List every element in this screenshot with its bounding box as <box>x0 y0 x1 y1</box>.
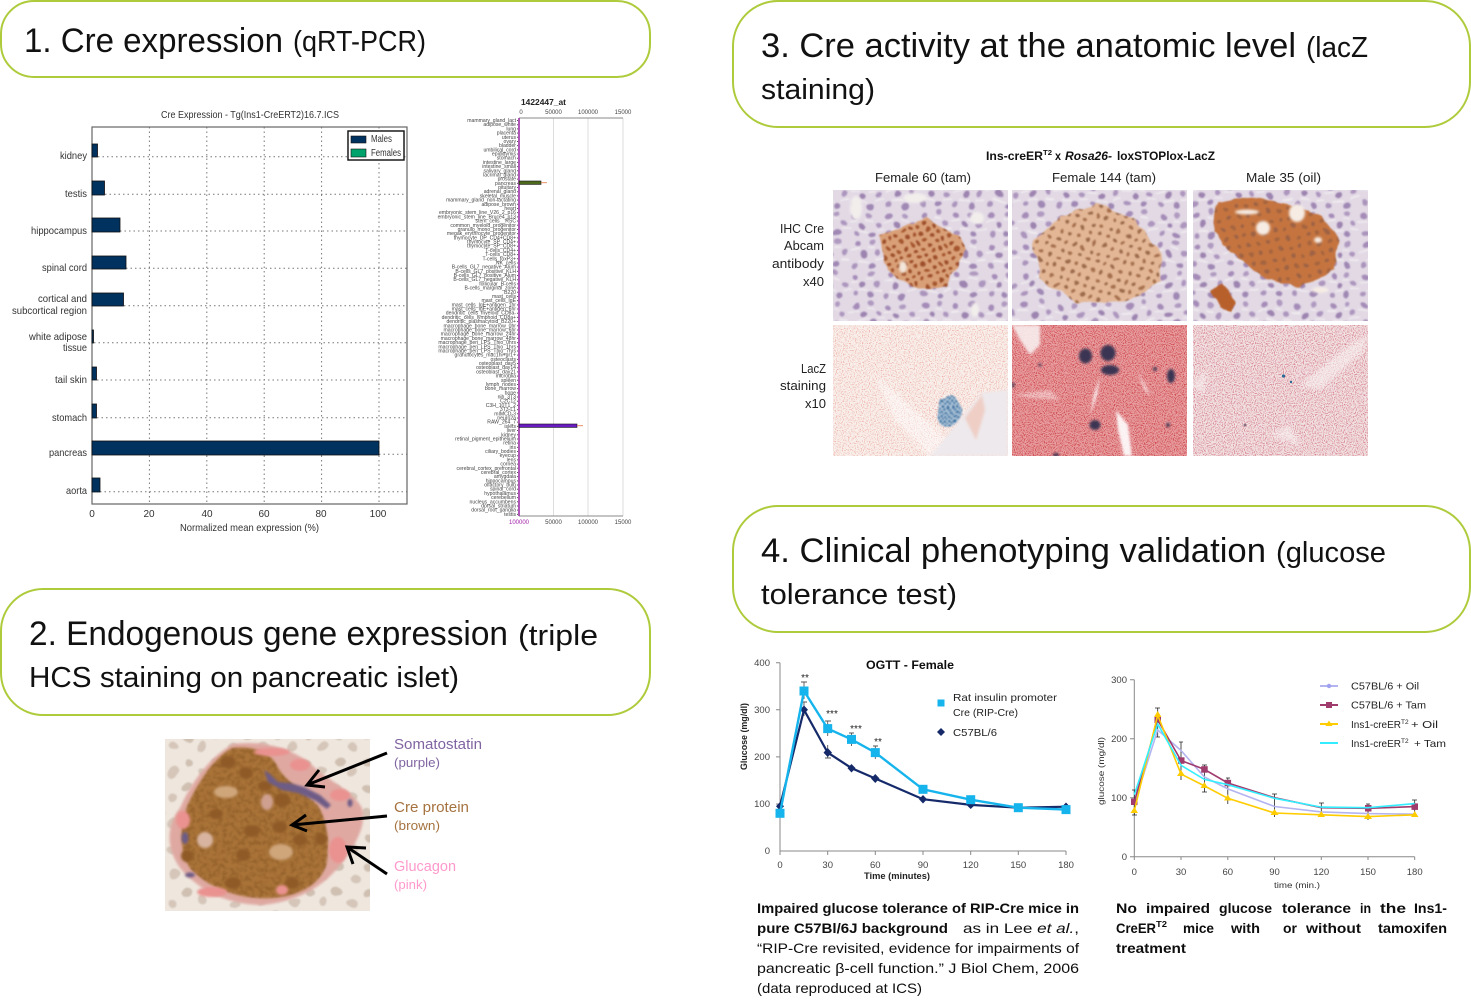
photo: IHC Male 35 <box>1193 190 1368 321</box>
bar chart: 1422447_at tissue atlas: T-cells_CD4+ <box>485 248 516 254</box>
bar chart: 1422447_at tissue atlas: pancreas <box>495 181 516 187</box>
bar chart: Cre expression by tissue: 100 <box>370 509 387 520</box>
bar chart: 1422447_at tissue atlas: spleen <box>501 378 516 384</box>
bar chart: 1422447_at tissue atlas: heart <box>504 206 517 212</box>
caption: no impaired glucose tolerance in Ins1-CreERT2: with <box>1230 921 1260 936</box>
line chart: Ins1-creERT2 glucose tolerance: 300 <box>1111 675 1127 686</box>
bar chart: 1422447_at tissue atlas: B-cells_GL7_negative_Alum <box>452 265 516 271</box>
column headers: Male 35 (oil) <box>1246 171 1321 185</box>
caption: no impaired glucose tolerance in Ins1-CreERT2: tolerance <box>1282 901 1351 916</box>
significance stars <box>801 673 882 748</box>
bar chart: 1422447_at tissue atlas: follicular_B-cells <box>479 281 516 287</box>
line chart: Ins1-creERT2 glucose tolerance: 180 <box>1407 867 1423 878</box>
caption: no impaired glucose tolerance in Ins1-CreERT2: tamoxifen <box>1378 921 1447 936</box>
row label: IHC Cre: antibody <box>772 257 825 271</box>
photo: IHC Female 60 <box>833 190 1008 321</box>
line chart: Ins1-creERT2 glucose tolerance: 120 <box>1313 867 1329 878</box>
label: Cre protein <box>394 800 469 833</box>
bar chart: Cre expression by tissue: subcortical region <box>12 305 87 317</box>
bar chart: 1422447_at tissue atlas: 15000 <box>615 110 632 116</box>
significance stars: ** <box>801 673 809 684</box>
bar chart: 1422447_at tissue atlas: ciliary_bodies <box>485 449 516 455</box>
bar chart: 1422447_at tissue atlas: lymph_nodes <box>486 382 516 388</box>
bar chart: 1422447_at tissue atlas: B-cells_GL7_negative_KLH <box>453 277 516 283</box>
bar chart: 1422447_at tissue atlas: osteoblast_day21 <box>476 369 516 375</box>
row label: LacZ staining: staining <box>780 379 826 393</box>
bar chart: 1422447_at tissue atlas: cornea <box>500 462 516 468</box>
bar chart: Cre expression by tissue: 0 <box>89 509 95 520</box>
label: Glucagon: Glucagon <box>394 859 456 875</box>
series: RIP-Cre <box>776 686 1070 818</box>
bar chart: 1422447_at tissue atlas: C3H_10T1_2 <box>486 403 516 409</box>
series: Ins1-creERT2 + Oil <box>1130 711 1418 819</box>
bar chart: Cre expression by tissue <box>12 109 407 534</box>
OGTT legend: Rat insulin promoter <box>953 692 1058 704</box>
line chart: Ins1-creERT2 glucose tolerance: 0 <box>1122 852 1127 863</box>
label: Cre protein: Cre protein <box>394 800 469 816</box>
bar chart: 1422447_at tissue atlas: prostate <box>498 177 516 183</box>
row label: IHC Cre: Abcam <box>784 239 824 253</box>
bar chart: Cre expression by tissue: aorta <box>66 485 87 497</box>
bar chart: 1422447_at tissue atlas: 50000 <box>545 520 563 526</box>
bar chart: 1422447_at tissue atlas: macrophage_bone_marrow_24hr <box>441 332 516 338</box>
row label: LacZ staining: LacZ <box>801 362 826 376</box>
bar chart: Cre expression by tissue: 40 <box>201 509 213 520</box>
bar chart: 1422447_at tissue atlas: nucleus_accumbens <box>470 499 516 505</box>
line chart: OGTT Female <box>739 658 1074 882</box>
bar chart: 1422447_at tissue atlas: NK_cells <box>496 260 516 266</box>
line chart: Ins1-creERT2 glucose tolerance: 60 <box>1223 867 1233 878</box>
arrow: to Cre protein <box>292 815 387 831</box>
line chart: OGTT Female: 200 <box>754 752 770 763</box>
bar chart: 1422447_at tissue atlas: retinal_pigment_epithelium <box>455 436 516 442</box>
bar chart: 1422447_at tissue atlas: cerebral_cortex_prefrontal <box>457 466 516 472</box>
line chart: Ins1-creERT2 glucose tolerance: time (min.) <box>1274 880 1320 890</box>
heading: Cre expression: 1. Cre expression <box>24 22 283 60</box>
panel: 3. Cre activity header <box>733 1 1470 127</box>
line chart: OGTT Female: 60 <box>870 860 881 871</box>
line chart: OGTT Female: 180 <box>1058 860 1074 871</box>
bar chart: Cre expression by tissue: hippocampus <box>31 225 87 237</box>
label: Cre protein: (brown) <box>394 819 440 833</box>
bar chart: Cre expression by tissue: 80 <box>315 509 327 520</box>
caption: no impaired glucose tolerance in Ins1-CreERT2 <box>1116 901 1447 956</box>
bar chart: 1422447_at tissue atlas: dorsal_striatum <box>481 504 516 510</box>
bar chart: 1422447_at tissue atlas: mIMCD-3 <box>494 411 516 417</box>
caption: no impaired glucose tolerance in Ins1-CreERT2: impaired <box>1146 901 1210 916</box>
heading: Clinical phenotyping validation: (glucose <box>1276 537 1386 569</box>
bar chart: 1422447_at tissue atlas: dendritic_plasmacytoid_B220+ <box>446 319 516 325</box>
bar chart: 1422447_at tissue atlas: stem_cells__RSC <box>476 219 516 225</box>
caption: no impaired glucose tolerance in Ins1-CreERT2: in <box>1360 901 1371 916</box>
bar chart: 1422447_at tissue atlas: mammary_gland_non-lactating <box>446 198 516 204</box>
label: Glucagon: (pink) <box>394 878 427 892</box>
bar chart: 1422447_at tissue atlas: nih_3T3 <box>498 394 516 400</box>
figure title: Ins-creERT2 x Rosa26: loxSTOPlox-LacZ <box>1117 149 1215 163</box>
bar chart: Cre expression by tissue: spinal cord <box>42 262 87 274</box>
caption: RIP-Cre impaired glucose tolerance: Impaired glucose tolerance of RIP-Cre mice in <box>757 901 1079 916</box>
caption: no impaired glucose tolerance in Ins1-CreERT2: treatment <box>1116 941 1186 956</box>
line chart: OGTT Female: 30 <box>822 860 833 871</box>
OGTT title: OGTT - Female <box>866 658 954 672</box>
bar chart: 1422447_at tissue atlas: macrophage_peri_LPS_Thio_0hrs <box>438 340 516 346</box>
second chart legend: Ins1-creER <box>1351 719 1401 731</box>
label: Glucagon <box>394 859 456 892</box>
second chart legend: Ins1-creER <box>1351 738 1401 750</box>
row label: LacZ staining <box>780 362 826 411</box>
figure title: Ins-creERT2 x Rosa26: Rosa26- <box>1065 149 1112 163</box>
caption: RIP-Cre impaired glucose tolerance: “RIP-Cre revisited, evidence for impairments of <box>757 941 1079 956</box>
photo: LacZ Male 35 <box>1193 325 1368 456</box>
bar chart: 1422447_at tissue atlas: mast_cells_IgE+antigen_6hr <box>452 307 516 313</box>
line chart: Ins1-creERT2 glucose tolerance: 0 <box>1132 867 1137 878</box>
caption: RIP-Cre impaired glucose tolerance: pure C57Bl/6J background <box>757 921 948 936</box>
bar chart: 1422447_at tissue atlas: common_myeloid_progenitor <box>450 223 516 229</box>
bar chart: 1422447_at tissue atlas: bone <box>505 390 516 396</box>
second chart legend: T2 <box>1401 719 1409 726</box>
bar chart: 1422447_at tissue atlas: T-cells_CD8+ <box>485 252 516 258</box>
chart legend <box>348 131 404 160</box>
bar chart: 1422447_at tissue atlas: embryonic_stem_line_Bruce4_p13 <box>438 214 516 220</box>
bar chart: 1422447_at tissue atlas: spinal_cord <box>490 487 516 493</box>
figure title: Ins-creERT2 x Rosa26: x <box>1055 149 1061 163</box>
bar chart: 1422447_at tissue atlas: mast_cells_IgE+antigen_1hr <box>452 302 516 308</box>
bar chart: 1422447_at tissue atlas: 100000 <box>509 520 530 526</box>
panel: 1. Cre expression header <box>1 1 650 77</box>
line chart: OGTT Female: 0 <box>777 860 783 871</box>
caption: no impaired glucose tolerance in Ins1-CreERT2: Ins1- <box>1414 901 1447 916</box>
series: C57BL/6 + Oil <box>1134 730 1415 814</box>
series: C57BL/6 + Tam <box>1131 716 1418 812</box>
OGTT legend <box>937 692 1058 739</box>
bar chart: 1422447_at tissue atlas: islets <box>504 424 516 430</box>
bar chart: Cre expression by tissue: 60 <box>258 509 270 520</box>
bar chart: 1422447_at tissue atlas: B220 <box>504 290 516 296</box>
bar chart: 1422447_at tissue atlas: C2C12 <box>500 399 516 405</box>
significance stars: *** <box>826 709 838 720</box>
bar chart: Cre expression by tissue: tissue <box>63 342 87 354</box>
line chart: OGTT Female: 120 <box>963 860 979 871</box>
line chart: Ins1-creERT2 glucose tolerance: glucose (mg/dl) <box>1096 737 1106 805</box>
bar chart: 1422447_at tissue atlas: kidney <box>501 432 516 438</box>
bar chart: 1422447_at tissue atlas: B-cells_marginal_zone <box>464 286 516 292</box>
caption: RIP-Cre impaired glucose tolerance: pancreatic β-cell function.” J Biol Chem, 2006 <box>757 961 1079 976</box>
bar chart: 1422447_at tissue atlas: 100000 <box>578 110 599 116</box>
bar chart: 1422447_at tissue atlas: olfactory_bulb <box>484 482 516 488</box>
bar chart: 1422447_at tissue atlas: iris <box>509 445 516 451</box>
bar chart: 1422447_at tissue atlas: macrophage_bone_marrow_48hr <box>441 336 516 342</box>
panel: 4. Clinical phenotyping header <box>733 506 1470 632</box>
second chart legend: T2 <box>1401 738 1409 745</box>
second chart legend: + Oil <box>1411 719 1438 731</box>
figure title: Ins-creERT2 x Rosa26 <box>986 148 1215 163</box>
bar chart: 1422447_at tissue atlas: umbilical_cord <box>483 147 516 153</box>
bar chart: 1422447_at tissue atlas: ovary <box>504 139 516 145</box>
bar chart: 1422447_at tissue atlas: dorsal_root_ganglia <box>471 508 516 514</box>
bar chart: 1422447_at tissue atlas: intestine_large <box>483 160 516 166</box>
bar chart: Cre expression by tissue: Normalized mean expression (%) <box>180 522 319 534</box>
bar chart: 1422447_at tissue atlas: cerebellum <box>491 495 516 501</box>
caption: RIP-Cre impaired glucose tolerance <box>757 901 1079 996</box>
panel: 2. Endogenous gene expression header <box>1 589 650 715</box>
bar chart: 1422447_at tissue atlas: intestine_small <box>482 164 516 170</box>
caption: no impaired glucose tolerance in Ins1-CreERT2: CreER <box>1116 921 1156 936</box>
heading: Cre activity at the anatomic level <box>761 27 1368 106</box>
bar chart: 1422447_at tissue atlas: thymocyte_SP_CD8+ <box>467 244 516 250</box>
bar chart: Cre expression by tissue: white adipose <box>28 331 87 343</box>
caption: no impaired glucose tolerance in Ins1-CreERT2: or <box>1283 921 1298 936</box>
line chart: Ins1-creERT2 glucose tolerance: 150 <box>1360 867 1376 878</box>
bar chart: 1422447_at tissue atlas: mast_cells_IgE <box>481 298 517 304</box>
line chart: Ins1-creERT2 glucose tolerance: 90 <box>1269 867 1280 878</box>
line chart: OGTT Female: 400 <box>754 658 770 669</box>
line chart: OGTT Female: 0 <box>765 846 770 857</box>
bar chart: 1422447_at tissue atlas: megak_erythrocyte_progenitor <box>447 231 516 237</box>
heading: Clinical phenotyping validation: tolerance test) <box>761 579 957 611</box>
significance stars: *** <box>850 724 862 735</box>
bar chart: 1422447_at tissue atlas: adrenal_gland <box>484 189 516 195</box>
bar chart: Cre expression by tissue: pancreas <box>49 447 87 459</box>
bar chart: 1422447_at tissue atlas: lung <box>506 126 516 132</box>
bar chart: 1422447_at tissue atlas: bone_marrow <box>485 386 516 392</box>
bar chart: 1422447_at tissue atlas: uterus <box>502 135 516 141</box>
bar chart: 1422447_at tissue atlas: bladder <box>499 143 516 149</box>
OGTT legend: C57BL/6 <box>953 727 997 739</box>
bar chart: 1422447_at tissue atlas: macrophage_bone_marrow_6hr <box>444 328 516 334</box>
bar chart: 1422447_at tissue atlas: dendritic_cells_lymphoid_CD8a+ <box>442 315 516 321</box>
photo: IHC Female 144 <box>1012 190 1187 321</box>
line chart: OGTT Female: 150 <box>1010 860 1026 871</box>
chart legend: Females <box>371 148 401 159</box>
figure title: Ins-creERT2 x Rosa26: Ins-creER <box>986 149 1043 163</box>
heading: Cre activity at the anatomic level: (lacZ <box>1306 32 1368 64</box>
bar chart: 1422447_at tissue atlas: placenta <box>497 131 516 137</box>
heading: Cre activity at the anatomic level: 3. Cre activity at the anatomic level <box>761 27 1296 65</box>
bar chart: 1422447_at tissue atlas: cerebral_cortex <box>481 470 516 476</box>
caption: no impaired glucose tolerance in Ins1-CreERT2: mice <box>1183 921 1214 936</box>
bar chart: 1422447_at tissue atlas: macrophage_peri_LPS_Thio_7hrs <box>438 348 516 354</box>
line chart: Ins1-creERT2 glucose tolerance <box>1096 675 1446 890</box>
bar chart: Cre expression by tissue: cortical and <box>38 293 87 305</box>
series: Ins1-creERT2 + Tam <box>1134 724 1415 808</box>
column headers: Female 144 (tam) <box>1052 171 1156 185</box>
second chart legend: C57BL/6 + Tam <box>1351 700 1426 712</box>
row label: IHC Cre: x40 <box>803 275 824 289</box>
bar chart: 1422447_at tissue atlas: hippocampus <box>486 478 516 484</box>
second chart legend <box>1320 680 1446 750</box>
heading: Cre activity at the anatomic level: staining) <box>761 74 875 106</box>
bar chart: 1422447_at tissue atlas: 50000 <box>545 110 563 116</box>
bar chart: 1422447_at tissue atlas: epididymis <box>492 152 516 158</box>
bar chart: 1422447_at tissue atlas: mammary_gland_lact <box>467 118 517 124</box>
bar chart: 1422447_at tissue atlas: embryonic_stem_line_V26_2_p16 <box>439 210 516 216</box>
significance stars: ** <box>874 737 882 748</box>
bar chart: Cre expression by tissue: stomach <box>52 412 87 424</box>
chart title: Cre Expression - Tg(Ins1-CreERT2)16.7.ICS <box>161 109 339 121</box>
bar chart: 1422447_at tissue atlas: macrophage_bone_marrow_0hr <box>444 323 516 329</box>
caption: no impaired glucose tolerance in Ins1-CreERT2: T2 <box>1156 920 1168 929</box>
bar chart: 1422447_at tissue atlas: thymocyte_DP_CD4+CD8+ <box>454 235 516 241</box>
heading: Endogenous gene expression: 2. Endogenous gene expression <box>29 615 508 653</box>
photo: LacZ Female 60 <box>833 325 1008 456</box>
line chart: OGTT Female: 90 <box>918 860 928 871</box>
bar chart: 1422447_at tissue atlas: hypothalamus <box>484 491 516 497</box>
bar chart: 1422447_at tissue atlas: stomach <box>497 156 516 162</box>
caption: no impaired glucose tolerance in Ins1-CreERT2: No <box>1116 901 1137 916</box>
bar chart: 1422447_at tissue atlas: microglia <box>496 374 516 380</box>
bar chart: 1422447_at tissue atlas: T-cells_foxP3+ <box>482 256 516 262</box>
bar chart: Cre expression by tissue: testis <box>65 188 87 200</box>
bar chart: 1422447_at tissue atlas: lacrimal_gland <box>483 172 516 178</box>
bar chart: Cre expression by tissue: tail skin <box>55 374 87 386</box>
label: Somatostatin <box>394 737 482 770</box>
chart legend: Males <box>371 134 392 145</box>
atlas chart title: 1422447_at <box>521 97 566 107</box>
column headers: Female 60 (tam) <box>875 171 971 185</box>
line chart: OGTT Female: 300 <box>754 705 770 716</box>
bar chart: 1422447_at tissue atlas: B-cells_GL7_positive_Alum <box>454 273 516 279</box>
row label: IHC Cre <box>772 222 825 289</box>
heading: Clinical phenotyping validation: 4. Clinical phenotyping validation <box>761 532 1266 570</box>
bar chart: 1422447_at tissue atlas: pituitary <box>498 185 516 191</box>
bar chart: 1422447_at tissue atlas: thymocyte_SP_CD4+ <box>467 240 516 246</box>
bar chart: 1422447_at tissue atlas: B-cells_GL7_positive_KLH <box>455 269 516 275</box>
bar chart: 1422447_at tissue atlas: neuro2a <box>497 416 516 422</box>
bar chart: 1422447_at tissue atlas: lens <box>507 457 516 463</box>
photo: triple-stained pancreatic islet <box>165 739 370 911</box>
bar chart: 1422447_at tissue atlas: macrophage_peri_LPS_Thio_1hrs <box>438 344 516 350</box>
label: Somatostatin: Somatostatin <box>394 737 482 753</box>
bar chart: 1422447_at tissue atlas: 3T3-L1 <box>500 407 516 413</box>
second chart legend: C57BL/6 + Oil <box>1351 680 1419 692</box>
bar chart: 1422447_at tissue atlas: adipose_brown <box>481 202 516 208</box>
bar chart: Cre expression by tissue: 20 <box>143 509 155 520</box>
line chart: Ins1-creERT2 glucose tolerance: 100 <box>1111 793 1127 804</box>
bar chart: 1422447_at tissue atlas: adipose_white <box>483 122 516 128</box>
heading: Endogenous gene expression <box>29 615 598 694</box>
caption: no impaired glucose tolerance in Ins1-CreERT2: glucose <box>1219 901 1272 916</box>
label: Somatostatin: (purple) <box>394 756 440 770</box>
bar chart: 1422447_at tissue atlas <box>438 97 632 526</box>
figure title: Ins-creERT2 x Rosa26: T2 <box>1043 148 1052 157</box>
line chart: OGTT Female: Time (minutes) <box>864 871 930 882</box>
heading: Endogenous gene expression: HCS staining on pancreatic islet) <box>29 662 459 694</box>
line chart: OGTT Female: 100 <box>754 799 770 810</box>
bar chart: 1422447_at tissue atlas: skeletal_muscle <box>480 193 516 199</box>
heading: Endogenous gene expression: (triple <box>518 620 598 652</box>
bar chart: 1422447_at tissue atlas: 15000 <box>615 520 632 526</box>
caption: RIP-Cre impaired glucose tolerance: as in Lee et al. , <box>963 921 1079 936</box>
bar chart: 1422447_at tissue atlas: granulocytes_mac1hi+gr1+ <box>455 353 516 359</box>
bar chart: 1422447_at tissue atlas: salivary_gland <box>483 168 516 174</box>
heading note: qRT-PCR: (qRT-PCR) <box>293 26 426 58</box>
bar chart: 1422447_at tissue atlas: RAW_264_7 <box>487 420 516 426</box>
OGTT legend: Cre (RIP-Cre) <box>953 707 1018 719</box>
line chart: OGTT Female: Glucose (mg/dl) <box>739 703 750 770</box>
bar chart: 1422447_at tissue atlas: osteoclasts <box>491 357 516 363</box>
bar chart: 1422447_at tissue atlas: dendritic_cells_myeloid_CD8a- <box>446 311 516 317</box>
column headers <box>875 171 1321 185</box>
arrow: to somatostatin <box>307 753 387 787</box>
caption: RIP-Cre impaired glucose tolerance: (data reproduced at ICS) <box>757 981 922 996</box>
bar chart: 1422447_at tissue atlas: mast_cells <box>492 294 516 300</box>
bar chart: 1422447_at tissue atlas: retina <box>503 441 516 447</box>
bar chart: 1422447_at tissue atlas: testis <box>504 512 516 518</box>
caption: no impaired glucose tolerance in Ins1-CreERT2: without <box>1305 921 1361 936</box>
row label: LacZ staining: x10 <box>805 397 826 411</box>
row label: IHC Cre: IHC Cre <box>780 222 824 236</box>
line chart: Ins1-creERT2 glucose tolerance: 30 <box>1176 867 1186 878</box>
caption: no impaired glucose tolerance in Ins1-CreERT2: the <box>1380 901 1406 916</box>
bar chart: 1422447_at tissue atlas: granulo_mono_progenitor <box>458 227 516 233</box>
bar chart: 1422447_at tissue atlas: 0 <box>519 110 523 116</box>
bar chart: 1422447_at tissue atlas: 100000 <box>578 520 599 526</box>
bar chart: Cre expression by tissue: kidney <box>60 150 88 162</box>
arrow: to glucagon <box>347 847 387 874</box>
bar chart: 1422447_at tissue atlas: osteoblast_day5 <box>479 361 516 367</box>
heading: Clinical phenotyping validation <box>761 532 1386 611</box>
bar chart: 1422447_at tissue atlas: osteoblast_day14 <box>476 365 516 371</box>
series: C57BL/6 <box>776 706 1070 811</box>
line chart: Ins1-creERT2 glucose tolerance: 200 <box>1111 734 1127 745</box>
bar chart: 1422447_at tissue atlas: liver <box>507 428 516 434</box>
second chart legend: + Tam <box>1414 738 1446 750</box>
bar chart: 1422447_at tissue atlas: eyecup <box>500 453 516 459</box>
photo: LacZ Female 144 <box>1012 325 1187 457</box>
bar chart: 1422447_at tissue atlas: amygdala <box>494 474 516 480</box>
